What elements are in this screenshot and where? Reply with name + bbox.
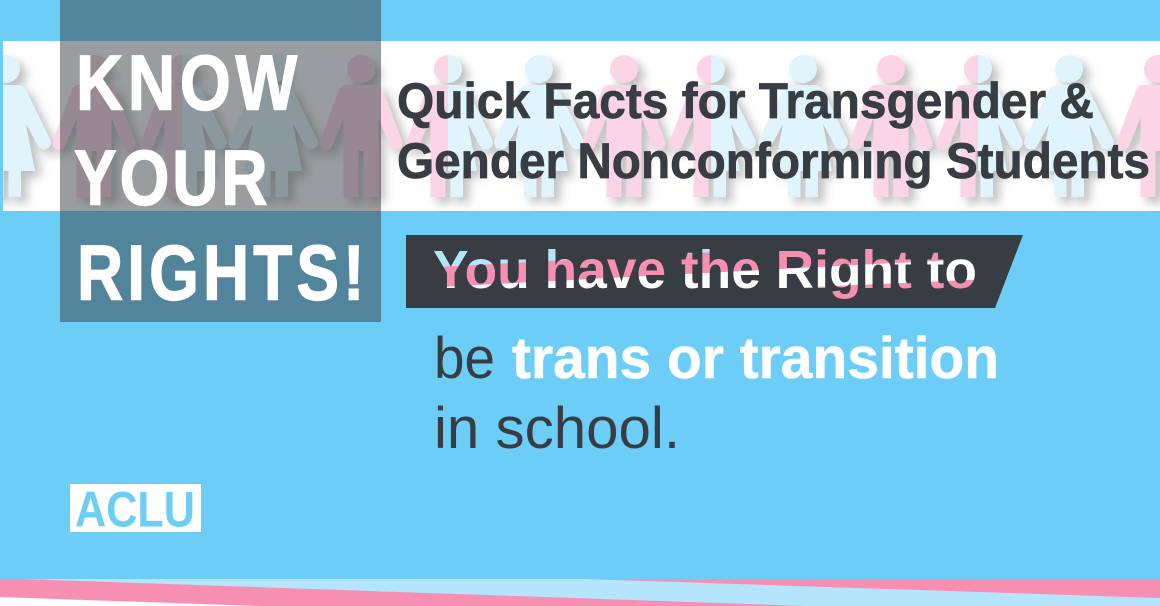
bottom stripes — [0, 579, 1160, 606]
white band — [3, 41, 1160, 211]
statement text — [434, 326, 999, 461]
statement text: trans or transition — [512, 326, 999, 391]
ACLU logo: ACLU — [75, 482, 195, 538]
heading: Quick Facts — [397, 73, 1150, 189]
title: Know Your Rights: YOUR — [74, 135, 271, 222]
translucent title panel — [60, 0, 381, 322]
statement text: in school. — [434, 396, 680, 461]
banner shape — [406, 235, 1023, 308]
title: Know Your Rights: KNOW — [76, 40, 302, 127]
title: Know Your Rights: RIGHTS! — [77, 230, 369, 317]
row of paper-chain figures — [0, 55, 1160, 197]
heading: Quick Facts: Quick Facts for Transgender & — [397, 73, 1094, 129]
banner text: You have the Right to — [434, 249, 975, 299]
statement text: be — [434, 326, 495, 391]
title: Know Your Rights — [74, 40, 369, 317]
